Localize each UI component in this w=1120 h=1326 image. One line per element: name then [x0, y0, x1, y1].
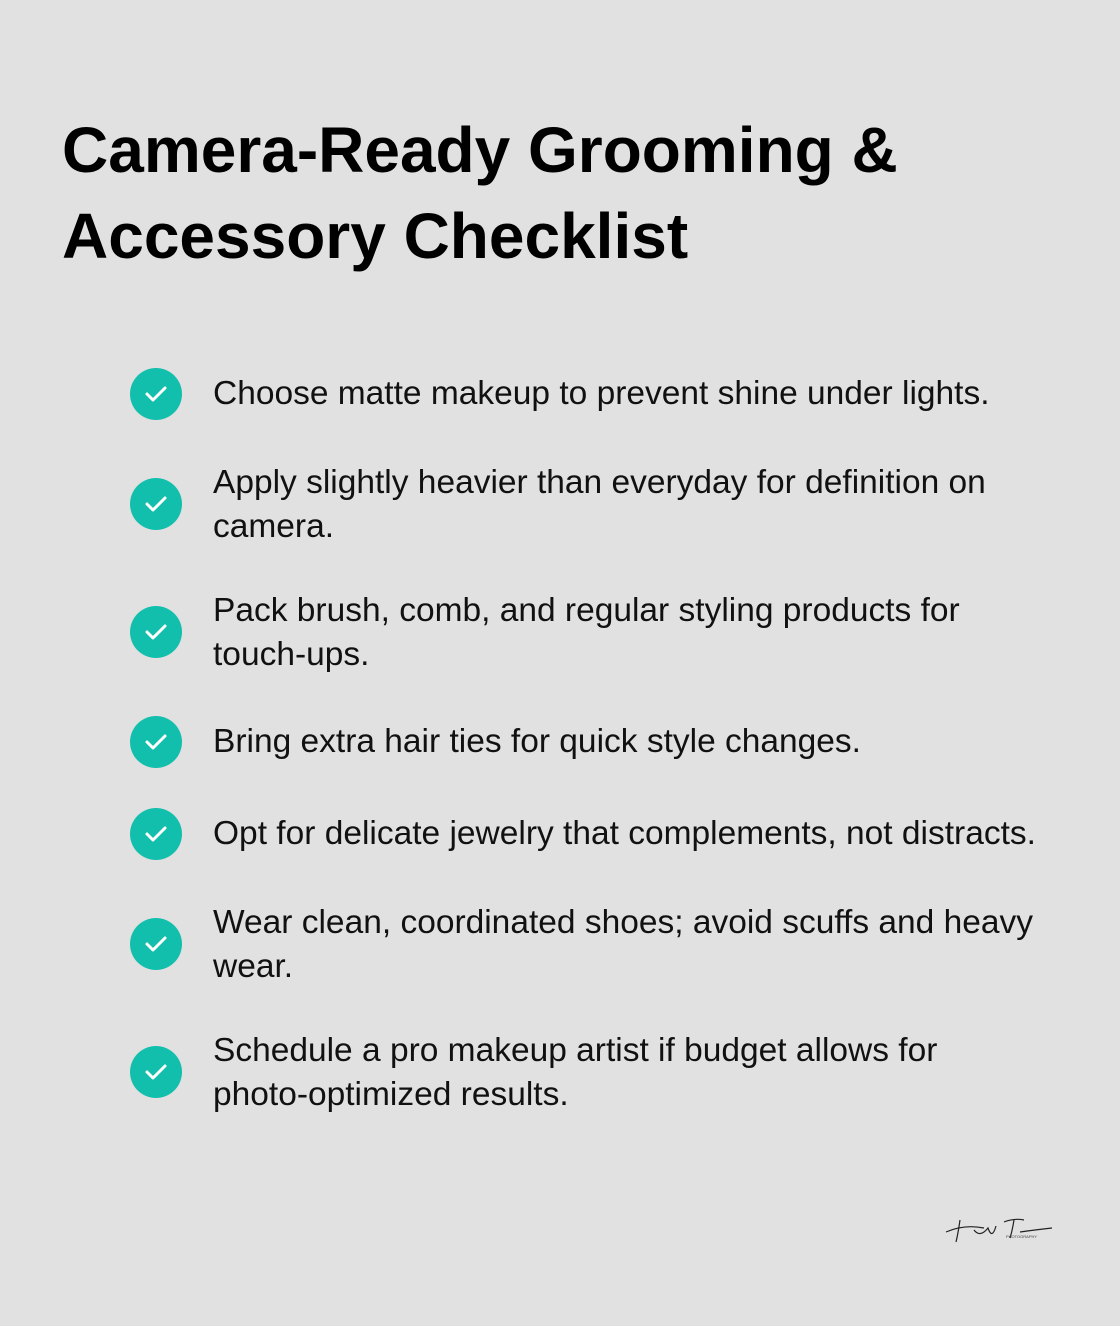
item 2: Apply slightly heavier than everyday for definition on: [213, 464, 986, 501]
item 7: Schedule a pro makeup artist if budget allows for: [213, 1032, 937, 1069]
title: [62, 114, 898, 272]
title: Accessory Checklist: [62, 200, 688, 272]
item 1: Choose matte makeup to prevent shine under lights.: [213, 375, 990, 412]
item 6: [130, 904, 1033, 985]
item 3: touch-ups.: [213, 636, 369, 673]
item 6: Wear clean, coordinated shoes; avoid scuffs and heavy: [213, 904, 1033, 941]
title: Camera-Ready Grooming &: [62, 114, 898, 186]
item 5: [130, 808, 1036, 860]
item 4: [130, 716, 861, 768]
item 1: [130, 368, 990, 420]
item 5: Opt for delicate jewelry that complements, not distracts.: [213, 815, 1036, 852]
item 4: Bring extra hair ties for quick style changes.: [213, 723, 861, 760]
item 7: [130, 1032, 937, 1113]
item 2: camera.: [213, 508, 334, 545]
signature logo: [946, 1218, 1052, 1242]
item 3: Pack brush, comb, and regular styling products for: [213, 592, 960, 629]
item 7: photo-optimized results.: [213, 1076, 569, 1113]
item 6: wear.: [213, 948, 293, 985]
signature logo: PHOTOGRAPHY: [1006, 1234, 1037, 1239]
item 2: [130, 464, 986, 545]
item 3: [130, 592, 960, 673]
